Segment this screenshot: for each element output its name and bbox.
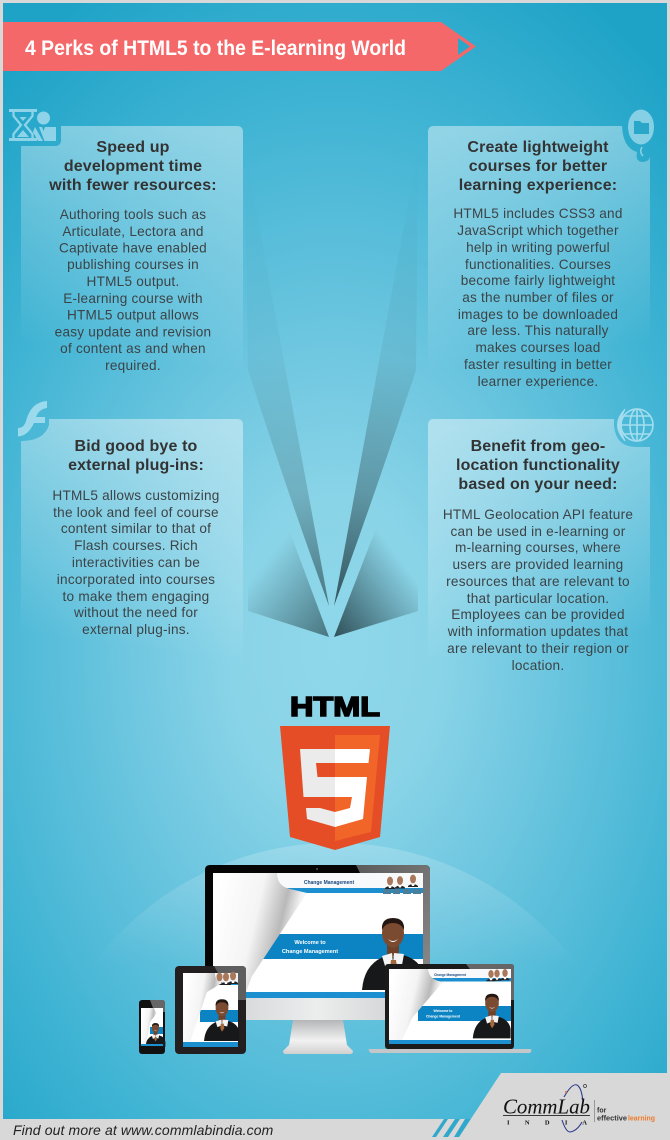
body text: HTML5 output. xyxy=(87,274,179,289)
logo: CommLab India: effective xyxy=(597,1116,627,1122)
heading xyxy=(48,139,217,194)
HTML wordmark: HTML xyxy=(290,691,380,722)
panel: external plug-ins xyxy=(18,401,243,690)
body text: with information updates that xyxy=(447,624,628,639)
heading: Benefit from geo- xyxy=(471,438,605,455)
body text xyxy=(55,207,211,373)
monitor screen content: Welcome to xyxy=(294,940,326,946)
icon: mouse with folder xyxy=(628,110,654,156)
footer link: Find out more at www.commlabindia.com xyxy=(13,1122,274,1138)
heading: external plug-ins: xyxy=(68,457,204,474)
body text: HTML5 allows customizing xyxy=(52,488,220,503)
panel: speed up development xyxy=(9,109,243,400)
logo corner xyxy=(459,1073,667,1137)
body text: learner experience. xyxy=(478,374,598,389)
body text: m-learning courses, where xyxy=(455,540,621,555)
monitor screen content: CommLab xyxy=(238,878,270,887)
body text: without the need for xyxy=(73,605,198,620)
laptop screen content: Change Management xyxy=(426,1014,461,1018)
body text: images to be downloaded xyxy=(458,307,618,322)
body text: location. xyxy=(512,658,564,673)
body text: can be used in e-learning or xyxy=(451,524,626,539)
laptop screen content: Change Management xyxy=(434,973,467,977)
panel: geo-location xyxy=(428,409,653,690)
body text: become fairly lightweight xyxy=(461,273,615,288)
heading: location functionality xyxy=(456,457,620,474)
body text xyxy=(52,488,220,637)
monitor screen content: Change Management xyxy=(304,880,354,886)
body text: external plug-ins. xyxy=(82,622,190,637)
heading: Speed up xyxy=(96,139,170,156)
logo: CommLab India: learning xyxy=(628,1116,655,1122)
monitor screen content xyxy=(213,873,423,998)
heading: based on your need: xyxy=(458,476,618,493)
heading: Create lightweight xyxy=(467,139,609,156)
icon: hourglass and person xyxy=(9,109,56,141)
body text: HTML Geolocation API feature xyxy=(443,507,633,522)
body text: HTML5 output allows xyxy=(67,308,199,322)
logo: CommLab India: for xyxy=(597,1108,607,1114)
fan rays pointing to HTML5 logo xyxy=(245,150,418,637)
body text: HTML5 includes CSS3 and xyxy=(453,206,623,221)
body text: Employees can be provided xyxy=(451,607,625,622)
devices xyxy=(139,865,531,1054)
HTML5 logo xyxy=(280,691,390,850)
body text: faster resulting in better xyxy=(464,357,612,372)
body text: Authoring tools such as xyxy=(60,207,206,222)
icon: globe xyxy=(618,409,653,441)
body text: resources that are relevant to xyxy=(446,574,630,589)
body text xyxy=(453,206,623,389)
body text: interactivities can be xyxy=(72,555,200,570)
phone xyxy=(139,1000,165,1054)
body text: of content as and when xyxy=(60,341,206,356)
monitor screen content: Change Management xyxy=(282,949,338,955)
heading: Bid good bye to xyxy=(75,438,198,455)
body text: incorporated into courses xyxy=(57,572,215,587)
body text: Flash courses. Rich xyxy=(74,538,198,553)
panel: lightweight courses xyxy=(428,110,654,400)
body text: as the number of files or xyxy=(462,290,614,305)
body text: Articulate, Lectora and xyxy=(62,224,204,239)
footer xyxy=(3,1073,667,1138)
footer stripes xyxy=(432,1119,472,1137)
heading: with fewer resources: xyxy=(48,177,217,194)
body text xyxy=(443,507,633,673)
body text: the look and feel of course xyxy=(53,505,219,520)
shield xyxy=(280,726,390,850)
body text: that particular location. xyxy=(467,591,609,606)
tablet xyxy=(175,966,246,1054)
body text: functionalities. Courses xyxy=(465,257,611,272)
footer band xyxy=(3,1119,473,1137)
laptop screen content xyxy=(389,969,511,1044)
body text: makes courses load xyxy=(475,340,601,355)
heading xyxy=(456,438,620,493)
icon: flash logo xyxy=(18,401,47,436)
logo: CommLab India: CommLab xyxy=(503,1094,590,1118)
heading: development time xyxy=(64,158,202,175)
body text: are relevant to their region or xyxy=(447,641,629,656)
logo: CommLab India xyxy=(503,1084,655,1132)
body text: required. xyxy=(105,358,161,373)
laptop screen content: Welcome to xyxy=(434,1009,452,1013)
heading xyxy=(68,438,204,474)
body text: JavaScript which together xyxy=(457,223,619,238)
body text: help in writing powerful xyxy=(466,240,610,255)
body text: users are provided learning xyxy=(453,557,623,572)
body text: easy update and revision xyxy=(55,324,211,340)
logo: CommLab India: I N D I A xyxy=(507,1120,587,1126)
body text: content similar to that of xyxy=(61,521,211,536)
body text: Captivate have enabled xyxy=(59,240,207,256)
body text: publishing courses in xyxy=(67,257,199,272)
title banner: 4 Perks of HTML5 to the E-learning World xyxy=(25,36,406,60)
heading xyxy=(459,139,617,194)
heading: courses for better xyxy=(469,158,607,175)
heading: learning experience: xyxy=(459,177,617,194)
title banner xyxy=(3,22,476,71)
body text: are less. This naturally xyxy=(467,323,609,338)
laptop xyxy=(369,964,531,1053)
body text: to make them engaging xyxy=(63,589,209,604)
body text: E-learning course with xyxy=(63,291,203,306)
desktop monitor xyxy=(205,865,430,1054)
